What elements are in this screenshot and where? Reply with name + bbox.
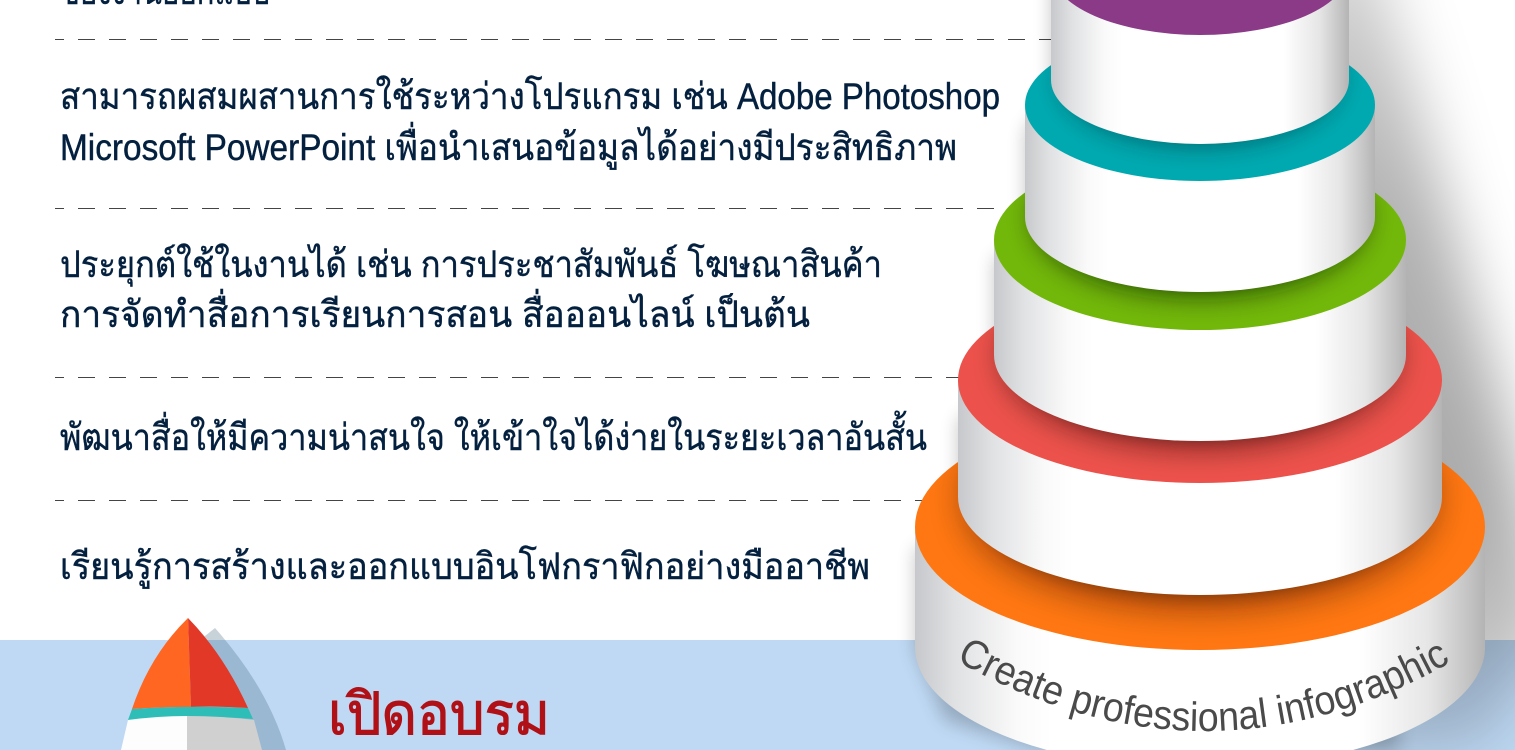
tier: red wall <box>958 380 1442 595</box>
hull grey <box>187 716 262 750</box>
sail shadow <box>200 628 286 750</box>
text: learn infographic: เรียนรู้การสร้างและออกแบบอินโฟกราฟิกอย่างมืออาชีพ <box>60 545 870 589</box>
text: combine programs line 2: Microsoft PowerPoint เพื่อนำเสนอข้อมูลได้อย่างมีประสิทธิภาพ <box>60 121 957 170</box>
tower shadow <box>915 0 1515 750</box>
text: develop media: พัฒนาสื่อให้มีความน่าสนใจ ให้เข้าใจได้ง่ายในระยะเวลาอันสั้น <box>60 410 927 458</box>
soft left contact shadow <box>915 0 1400 750</box>
tier: orange base wall <box>915 527 1485 750</box>
label: curved caption: Create professional infographic <box>962 640 1448 732</box>
orange inner shadow <box>975 399 1425 595</box>
tier: orange top <box>915 404 1485 650</box>
teal inner shadow <box>1047 66 1353 161</box>
sail right <box>188 618 248 708</box>
text: apply at work line 1: ประยุกต์ใช้ในงานได้ เช่น การประชาสัมพันธ์ โฆษณาสินค้า <box>60 243 882 287</box>
tier: red top <box>958 277 1442 483</box>
tier: teal top <box>1025 29 1375 181</box>
divider lines <box>55 40 1100 500</box>
red inner shadow <box>1008 269 1392 441</box>
tier: green wall <box>994 240 1406 441</box>
3D tiered tower <box>915 0 1485 750</box>
icon: sailboat <box>121 618 286 750</box>
tier: green top <box>994 150 1406 330</box>
green inner shadow <box>1037 142 1363 292</box>
text: apply at work line 2: การจัดทำสื่อการเรียนการสอน สื่อออนไลน์ เป็นต้น <box>60 288 810 335</box>
tier: teal wall <box>1025 105 1375 292</box>
blue footer band <box>0 640 1515 750</box>
soft right shadow <box>1150 0 1515 750</box>
sail left <box>132 618 191 709</box>
text: combine programs line 1: สามารถผสมผสานการใช้ระหว่างโปรแกรม เช่น Adobe Photoshop <box>60 75 1000 117</box>
text block: benefits list <box>60 0 1000 589</box>
sail band <box>128 707 253 720</box>
hull white <box>121 716 187 750</box>
heading: open training: เปิดอบรม <box>328 682 550 747</box>
tier: purple wall <box>1051 0 1349 144</box>
tier: purple top <box>1051 0 1349 35</box>
